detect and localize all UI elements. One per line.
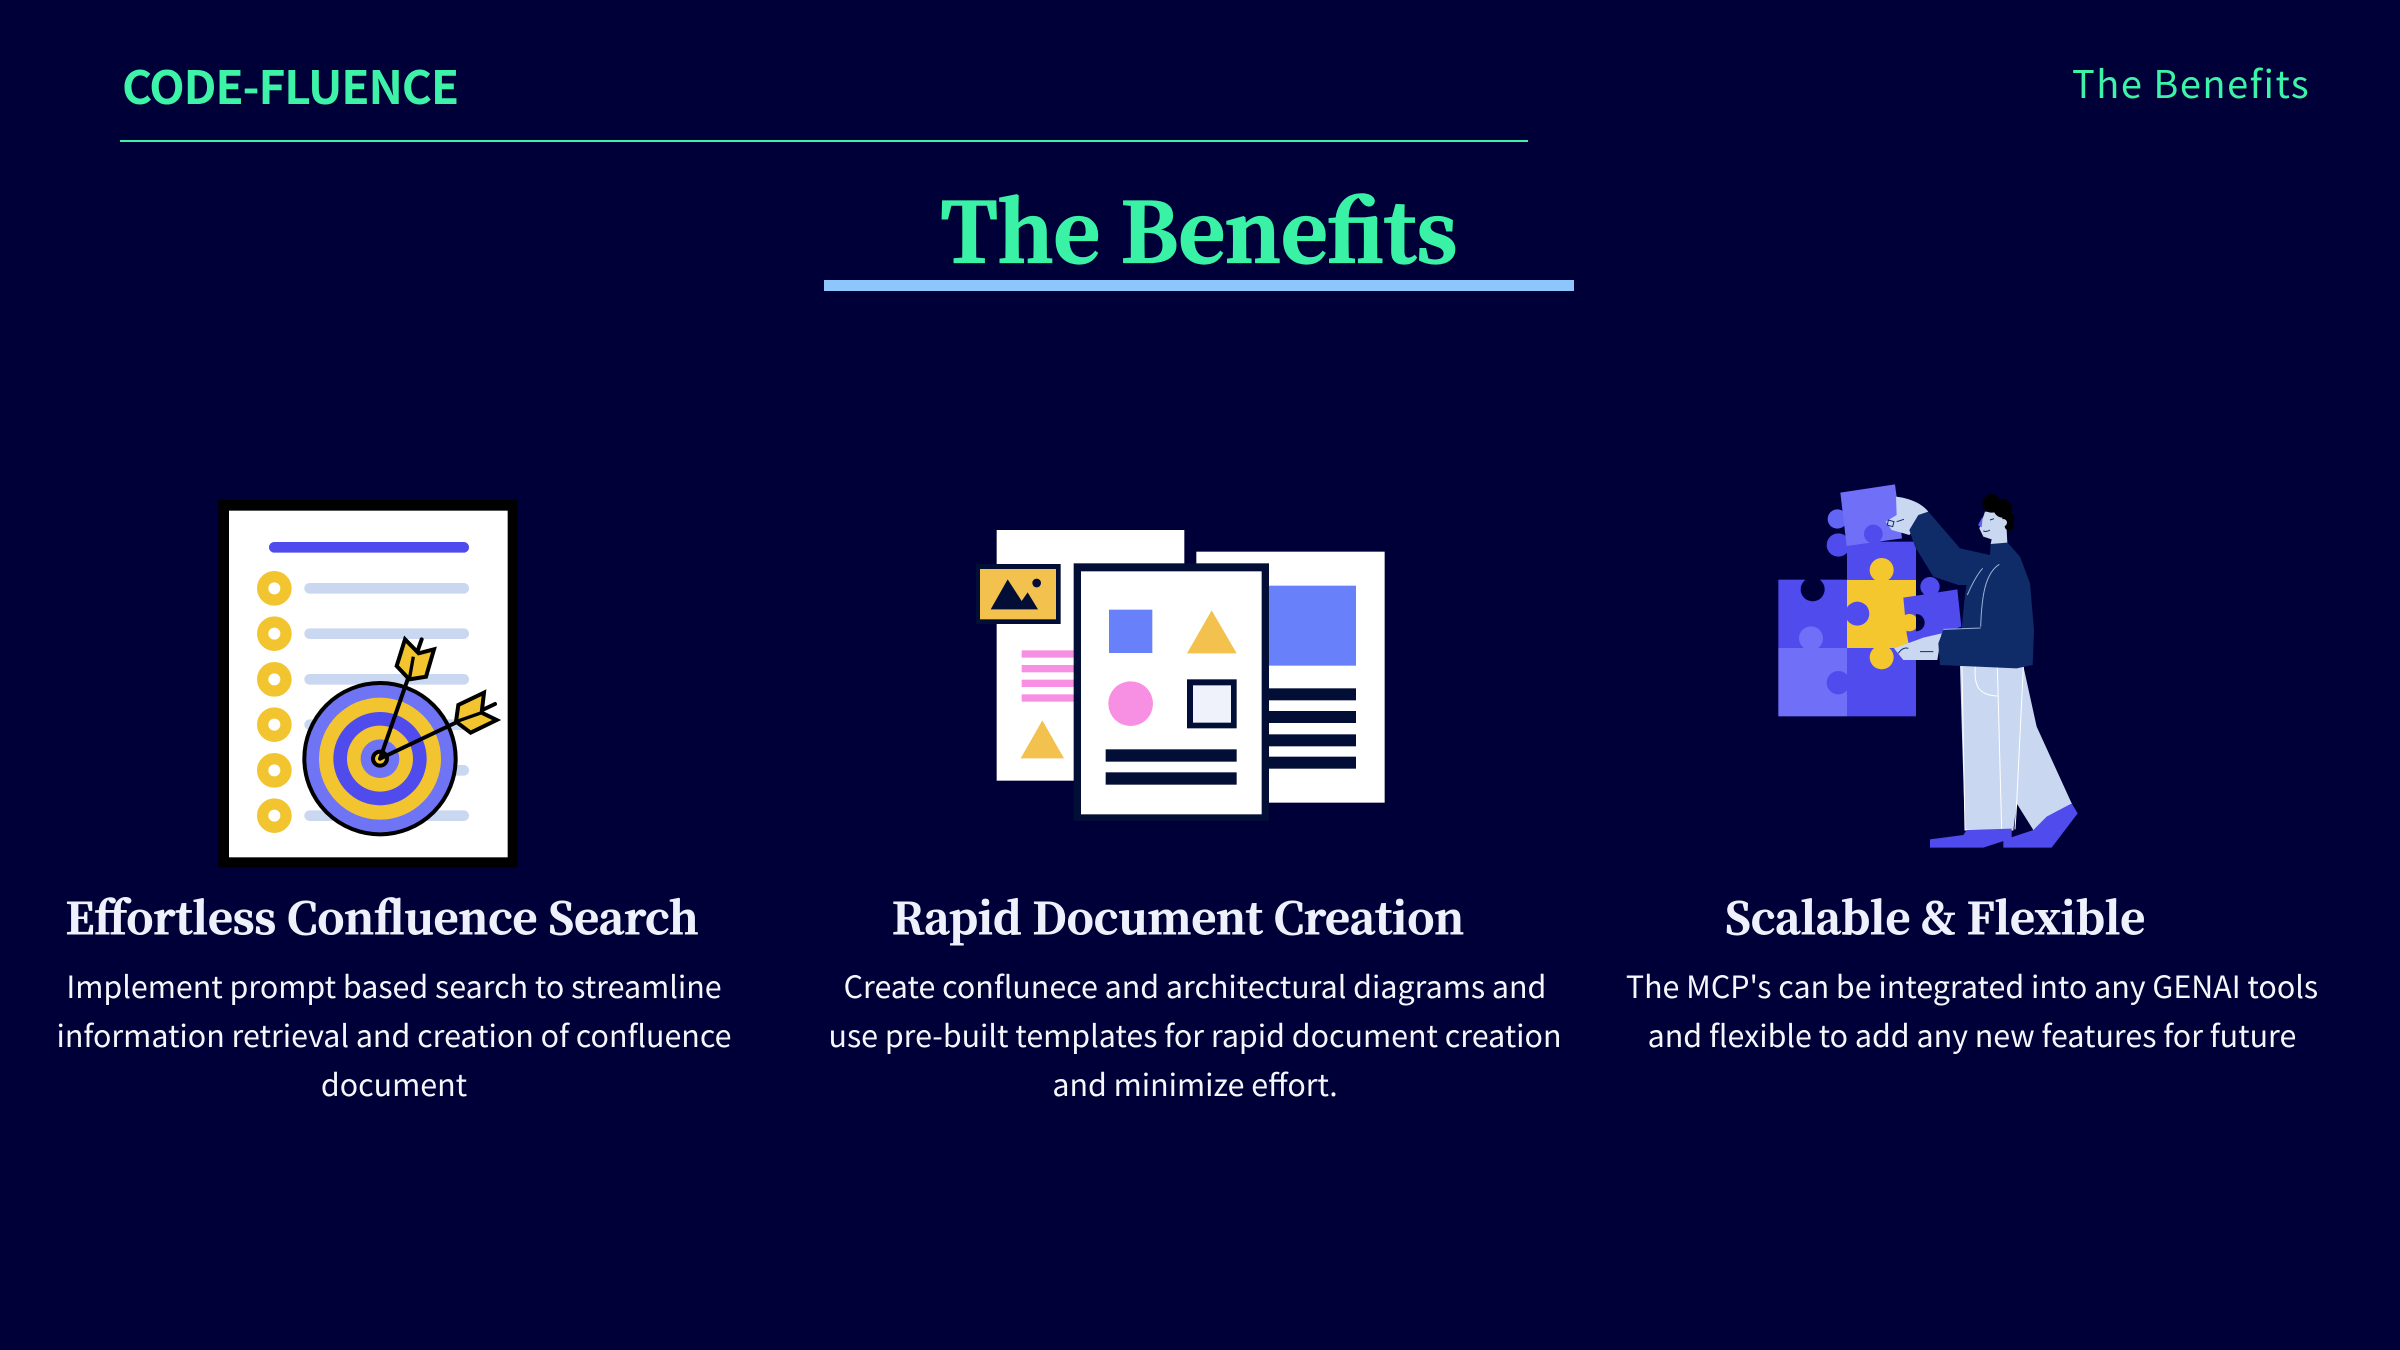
section label: The Benefits bbox=[2072, 54, 2310, 109]
title: The Benefits bbox=[941, 169, 1457, 286]
text: search: Implement prompt based search to streamline bbox=[66, 963, 722, 1007]
title underline bbox=[824, 280, 1574, 291]
text: scalable bbox=[1626, 963, 2318, 1056]
heading: search: Effortless Confluence Search bbox=[65, 885, 699, 947]
text: document creation: use pre-built templates for rapid document creation bbox=[828, 1012, 1562, 1056]
text: search: document bbox=[321, 1061, 467, 1105]
text: search: information retrieval and creation of confluence bbox=[57, 1012, 731, 1056]
text: scalable: The MCP's can be integrated into any GENAI tools bbox=[1626, 963, 2318, 1007]
icon: person assembling puzzle bbox=[1778, 484, 2078, 848]
brand name: CODE-FLUENCE bbox=[122, 52, 458, 118]
icon: documents bbox=[976, 530, 1385, 821]
text: document creation: and minimize effort. bbox=[1052, 1061, 1338, 1105]
text: document creation bbox=[828, 963, 1562, 1105]
heading: document creation: Rapid Document Creation bbox=[892, 885, 1464, 947]
puzzle bbox=[1778, 484, 1961, 716]
heading: scalable: Scalable & Flexible bbox=[1725, 885, 2145, 947]
icon: checklist with target bbox=[218, 500, 518, 867]
text: document creation: Create conflunece and architectural diagrams and bbox=[844, 963, 1546, 1007]
text: search bbox=[57, 963, 731, 1105]
person bbox=[1886, 494, 2078, 848]
text: scalable: and flexible to add any new features for future bbox=[1648, 1012, 2296, 1056]
